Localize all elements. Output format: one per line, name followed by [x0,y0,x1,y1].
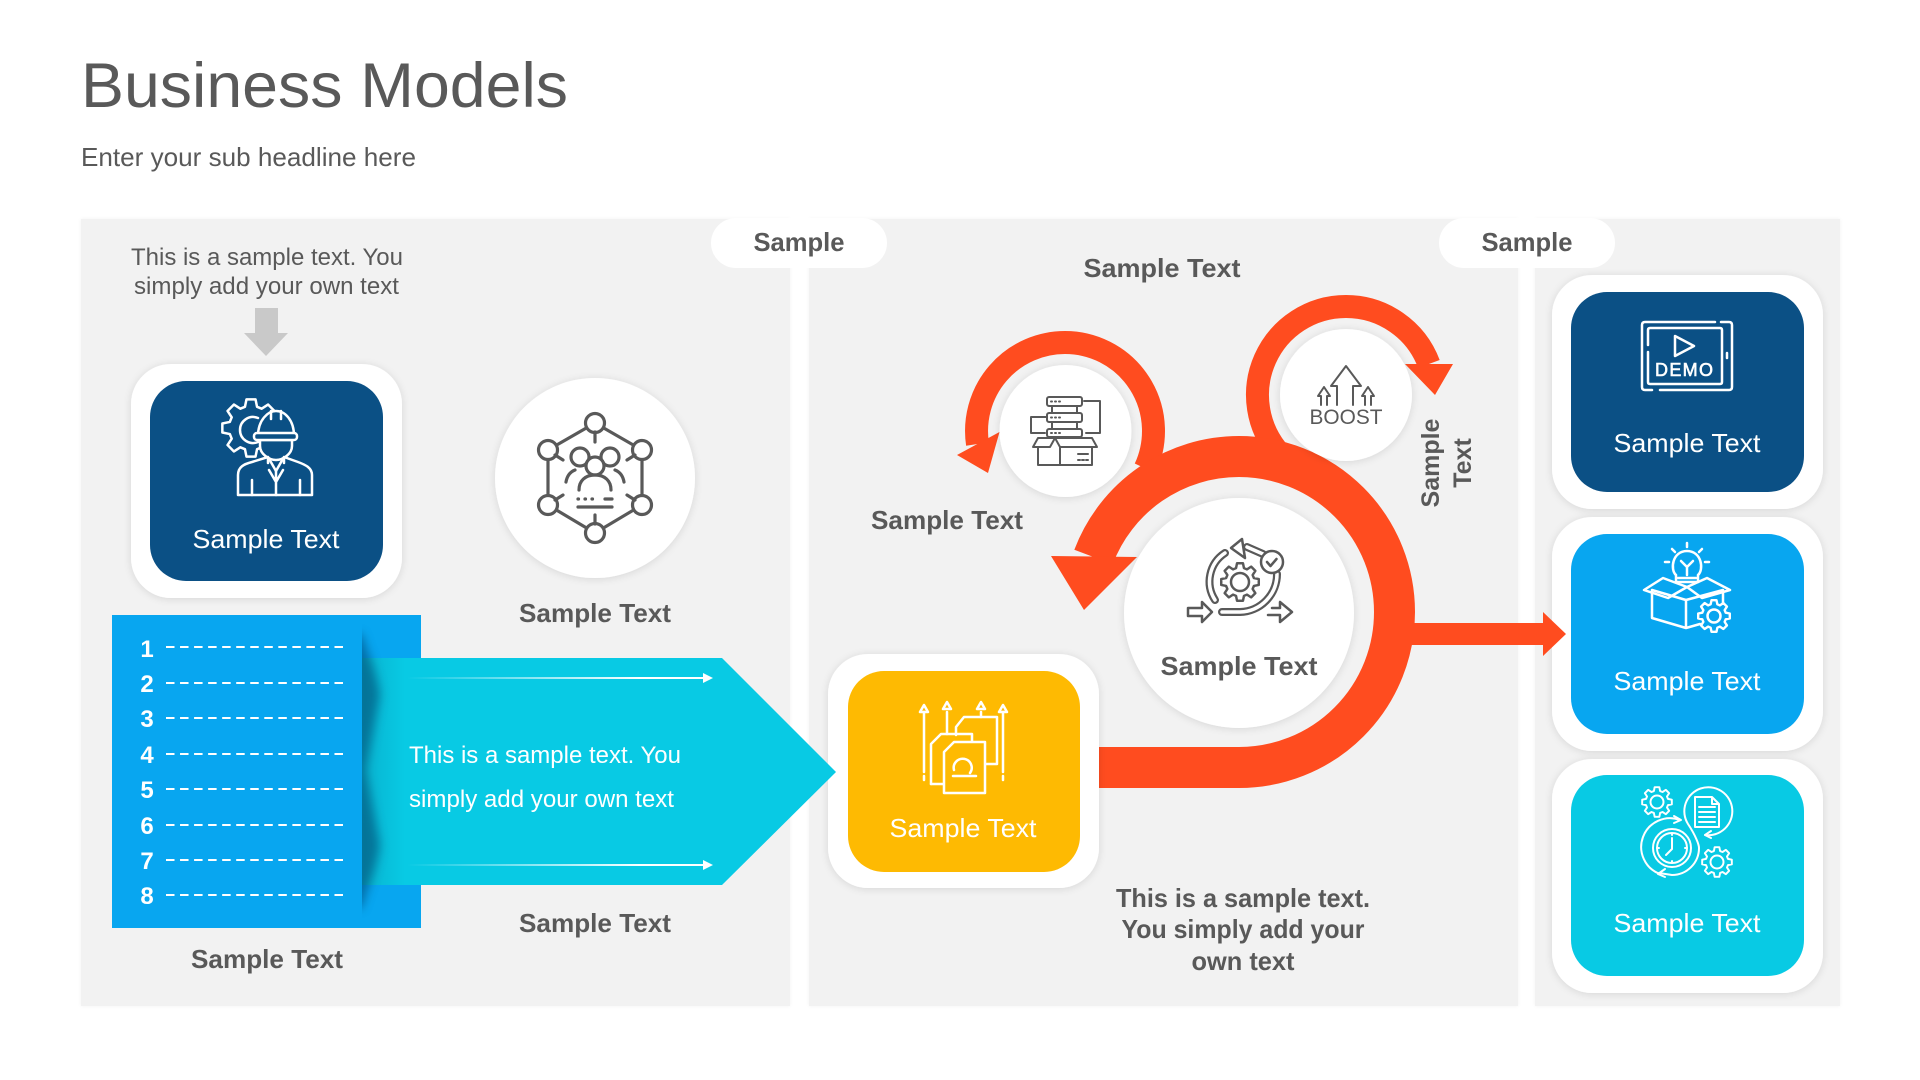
icon: clock document gears [1641,787,1732,877]
text block: bottom middle: You simply add your [1122,914,1364,944]
label: server box: Sample Text [871,505,1023,535]
circle: central process [1124,498,1354,728]
list numbers: 1 [140,636,154,663]
icon: box with bulb and gear [1644,543,1730,632]
label: below arrow: Sample Text [519,908,671,938]
rotated label: Sample [1417,418,1445,507]
rotated label: Text [1449,438,1477,488]
title: Business Models [81,51,568,121]
thin arrow: bottom [407,860,713,870]
circle: people network [495,378,695,578]
list numbers: 4 [140,742,154,769]
orange arc: left small [957,342,1153,473]
orange main ring arrow [1051,456,1394,768]
list numbers: 7 [140,848,154,875]
fold shadow [362,630,386,912]
thin arrow: top [407,673,713,683]
pill label: right: Sample [1482,227,1572,257]
icon text: demo: DEMO [1655,360,1713,380]
pentagon text [409,742,681,813]
pentagon text: This is a sample text. You [409,742,681,769]
text block: bottom middle: This is a sample text. [1116,883,1370,913]
panel: right background [1535,219,1840,1006]
card label: Sample Text [1614,428,1761,458]
circle: boost [1280,329,1412,461]
orange arc: right small [1257,306,1453,454]
label: below list: Sample Text [191,944,343,974]
subtitle: Enter your sub headline here [81,142,416,172]
icon: demo tablet [1642,322,1732,390]
icon: servers in box [1031,397,1100,465]
orange arrow: right to card [1405,612,1566,656]
pentagon text: simply add your own text [409,786,674,813]
list numbers: 6 [140,813,154,840]
pill label: right [1439,218,1615,268]
panel: left background [81,219,790,1006]
list panel [112,615,421,928]
icon: documents with arrows [920,702,1007,793]
icon text: boost: BOOST [1310,406,1383,429]
card: worker [131,364,402,598]
list numbers: 8 [140,883,154,910]
heading: middle panel: Sample Text [1084,253,1241,283]
card: product box idea [1552,517,1823,751]
icon: agile gear cycle [1188,539,1292,622]
list numbers: 2 [140,671,154,698]
label: central: Sample Text [1160,651,1318,681]
card label: Sample Text [890,813,1037,843]
card: process time [1552,759,1823,993]
pill label: left: Sample [754,227,844,257]
list numbers [140,636,154,910]
rotated label [1417,418,1477,507]
icon: boost arrows [1318,366,1374,405]
pill label: left [711,218,887,268]
circle: server box [1000,365,1132,497]
list numbers: 3 [140,706,154,733]
intro text block [131,244,403,300]
panel: middle background [809,219,1518,1006]
card label: Sample Text [1614,666,1761,696]
text block: bottom middle: own text [1192,946,1295,976]
card: yellow documents [828,654,1099,888]
text block: bottom middle [1116,883,1370,976]
label: network: Sample Text [519,598,671,628]
card label: Sample Text [192,524,340,554]
arrow: cyan pentagon [352,634,836,908]
card: demo [1552,275,1823,509]
card label: Sample Text [1614,908,1761,938]
list numbers: 5 [140,777,154,804]
list dashed lines [166,647,343,895]
icon: people network [538,414,652,542]
arrow: grey down [244,308,288,356]
icon: engineer with gear [222,399,312,495]
intro text block: This is a sample text. You [131,244,403,271]
intro text block: simply add your own text [134,273,399,300]
